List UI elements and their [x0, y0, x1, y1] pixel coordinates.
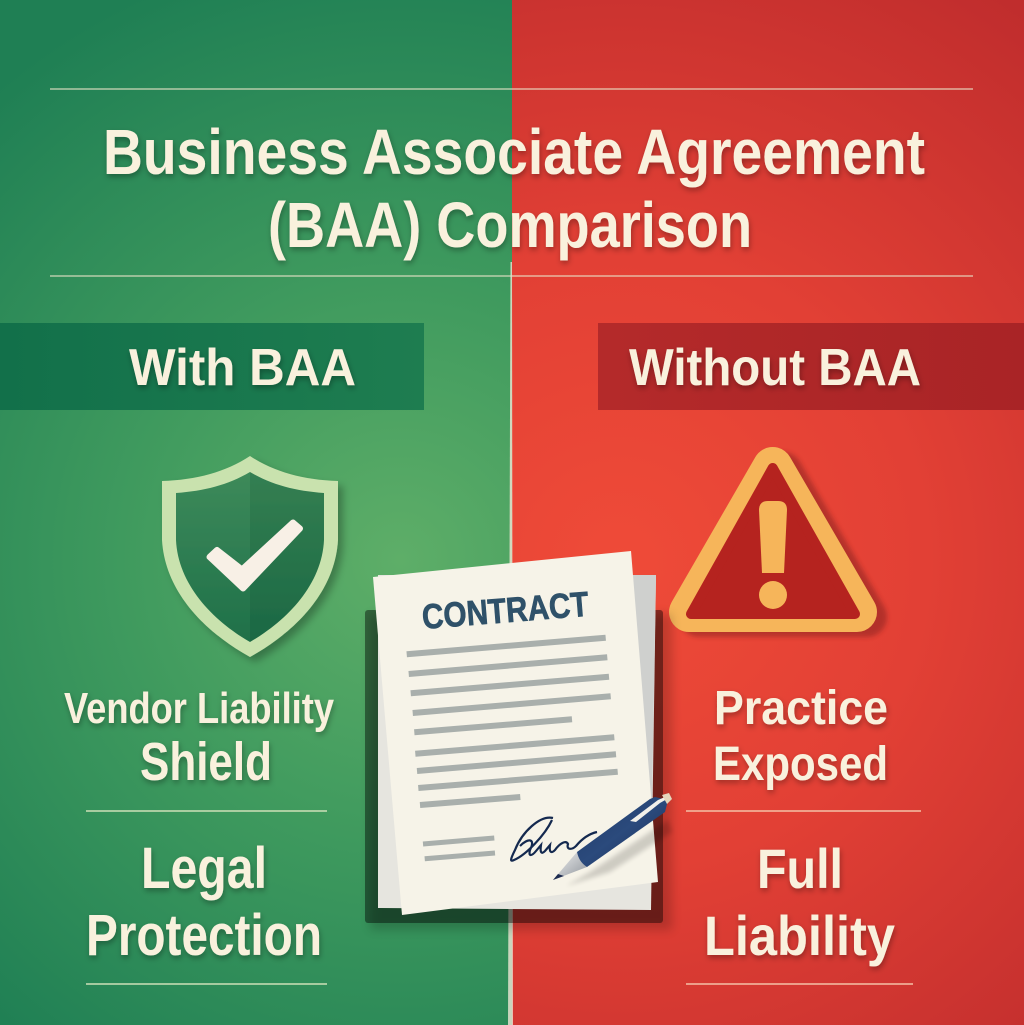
band: With BAA — [0, 323, 424, 410]
icon: pen — [553, 793, 672, 886]
title text: (BAA) Comparison — [268, 189, 752, 261]
signature — [511, 818, 597, 861]
icon: warning triangle — [689, 467, 867, 617]
label: Vendor Liability Shield: Shield — [140, 732, 272, 792]
icon: shield with check mark — [162, 456, 338, 657]
label: Legal Protection: Legal — [141, 836, 267, 901]
label: Full Liability: Liability — [704, 904, 895, 967]
title block — [50, 88, 973, 277]
label: Full Liability: Full — [757, 837, 843, 900]
contract text lines — [407, 638, 618, 859]
label: Practice Exposed — [713, 682, 888, 791]
panel: green With BAA side — [0, 0, 512, 1025]
band: With BAA: With BAA — [129, 339, 356, 397]
label: Practice Exposed: Exposed — [713, 738, 888, 791]
contract document with pen — [365, 551, 672, 930]
label: Practice Exposed: Practice — [714, 682, 888, 735]
label: Legal Protection — [86, 836, 322, 968]
panel: red Without BAA side — [512, 0, 1024, 1025]
label: Vendor Liability Shield — [64, 684, 334, 792]
band: Without BAA — [598, 323, 1024, 410]
label: Full Liability — [704, 837, 895, 967]
label: Legal Protection: Protection — [86, 903, 322, 968]
title text — [103, 116, 925, 261]
label: Vendor Liability Shield: Vendor Liability — [64, 684, 334, 733]
heading: CONTRACT: CONTRACT — [421, 585, 590, 637]
band: Without BAA: Without BAA — [629, 339, 921, 397]
